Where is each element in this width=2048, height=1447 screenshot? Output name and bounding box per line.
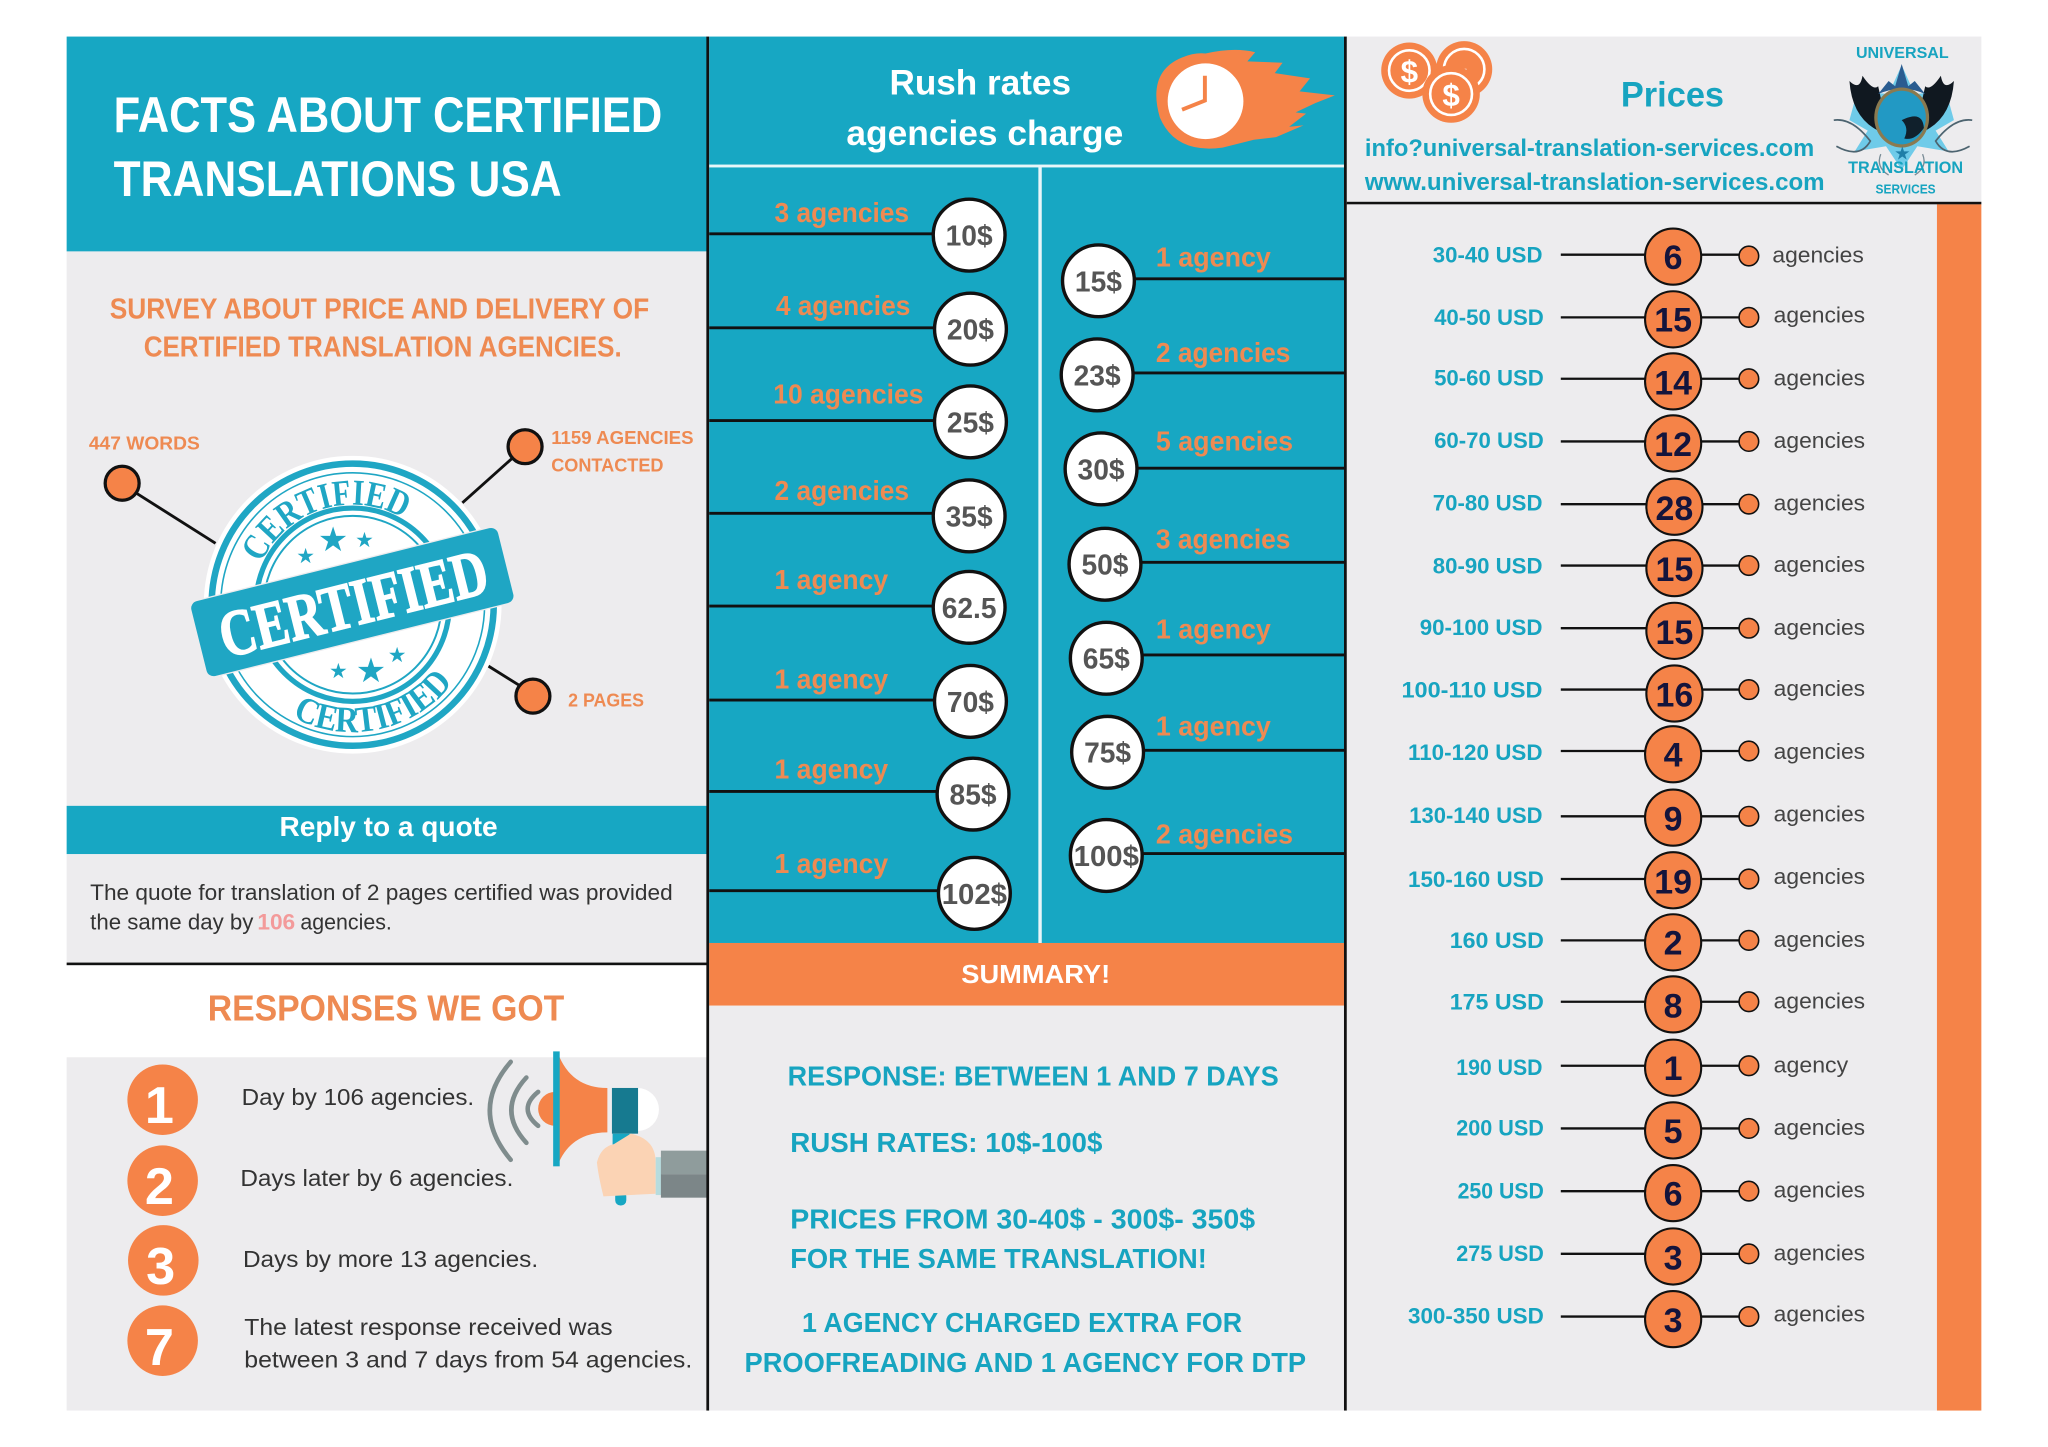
price row: 300-350 USD: 3: [1664, 1302, 1683, 1340]
price row: 60-70 USD: 12: [1654, 426, 1692, 464]
panel: summary bar: [709, 943, 1344, 1006]
icon: megaphone with hand: [490, 1051, 707, 1206]
price row: 70-80 USD: [1433, 479, 1865, 535]
response 3: Days by more 13 agencies.: [243, 1246, 538, 1272]
price row: 30-40 USD: [1433, 229, 1864, 285]
text: contact details: www.universal-translation-services.com: [1364, 169, 1825, 196]
price row: 130-140 USD: agencies: [1774, 802, 1865, 827]
price row: 40-50 USD: 40-50 USD: [1434, 305, 1544, 330]
text: prices summary: PRICES FROM 30-40$ - 300$- 350$: [790, 1203, 1256, 1234]
text: extra charges summary: PROOFREADING AND 1 AGENCY FOR DTP: [745, 1347, 1306, 1378]
price row: 200 USD: 200 USD: [1456, 1116, 1544, 1141]
response 7: The latest response received was: [244, 1314, 613, 1340]
text: prices summary: FOR THE SAME TRANSLATION!: [790, 1243, 1207, 1274]
price row: 90-100 USD: 15: [1656, 614, 1693, 652]
response 3: 3: [146, 1238, 175, 1296]
price row: 200 USD: 5: [1664, 1113, 1683, 1151]
heading: survey subtitle: SURVEY ABOUT PRICE AND DELIVERY OF: [110, 294, 649, 326]
rush right: 100$: [1070, 819, 1344, 891]
rush right: 75$: 1 agency: [1156, 710, 1272, 741]
rush left: 70$: 1 agency: [775, 663, 889, 694]
response 2: Days later by 6 agencies.: [240, 1165, 513, 1191]
rush left: 85$: [709, 753, 1009, 830]
callout: 447 words: [89, 432, 216, 543]
heading: survey subtitle: [110, 294, 649, 364]
rush left: 25$: 10 agencies: [773, 379, 923, 410]
response 2: [127, 1145, 513, 1216]
icon: certified stamp: CERTIFIED: [297, 672, 448, 732]
panel: survey: [66, 251, 706, 806]
price row: 80-90 USD: [1433, 540, 1865, 596]
price row: 40-50 USD: 15: [1654, 302, 1692, 340]
panel: prices header: [1347, 37, 1981, 202]
price row: 30-40 USD: agencies: [1772, 243, 1864, 268]
rush right: 65$: [1070, 614, 1344, 694]
rush left: 10$: [709, 197, 1005, 271]
price row: 190 USD: agency: [1774, 1052, 1849, 1077]
price row: 100-110 USD: 16: [1656, 677, 1693, 715]
price row: 110-120 USD: 110-120 USD: [1408, 740, 1543, 765]
price row: 275 USD: [1456, 1228, 1865, 1285]
response 7: 7: [145, 1319, 174, 1377]
rush right: 23$: [1061, 337, 1344, 411]
rush left: 85$: 1 agency: [775, 753, 889, 784]
heading: rush rates: Rush rates: [889, 64, 1071, 103]
response 1: Day by 106 agencies.: [242, 1084, 474, 1110]
rush right: 23$: 2 agencies: [1156, 337, 1290, 368]
price row: 130-140 USD: 130-140 USD: [1409, 803, 1543, 828]
panel: price list: [1347, 204, 1981, 1411]
price row: 100-110 USD: [1401, 665, 1865, 722]
price row: 300-350 USD: 300-350 USD: [1408, 1304, 1544, 1329]
text: response summary: RESPONSE: BETWEEN 1 AND 7 DAYS: [788, 1060, 1279, 1091]
icon: certified stamp: ★: [355, 528, 374, 552]
rush right: 15$: 1 agency: [1156, 241, 1272, 272]
price row: 60-70 USD: 60-70 USD: [1434, 428, 1544, 453]
price row: 90-100 USD: [1420, 603, 1865, 659]
panel: summary text: [709, 1006, 1344, 1411]
price row: 190 USD: [1456, 1040, 1849, 1096]
price row: 150-160 USD: 19: [1654, 863, 1692, 901]
icon: certified stamp: ★: [329, 659, 348, 683]
price row: 50-60 USD: 14: [1654, 364, 1692, 402]
heading: reply to a quote: Reply to a quote: [280, 811, 498, 842]
icon: coins: $: [1401, 54, 1418, 89]
price row: 50-60 USD: agencies: [1774, 365, 1865, 390]
price row: 70-80 USD: 70-80 USD: [1433, 491, 1543, 516]
price row: 100-110 USD: 100-110 USD: [1401, 677, 1543, 702]
price row: 80-90 USD: agencies: [1774, 552, 1865, 577]
rush right: 65$: 1 agency: [1156, 614, 1272, 645]
icon: certified stamp: CERTIFIED: [212, 536, 495, 672]
rush left: 25$: 25$: [947, 407, 994, 439]
price row: 30-40 USD: 30-40 USD: [1433, 243, 1543, 268]
rush right: 30$: 5 agencies: [1156, 426, 1293, 457]
text: quote sentence: 106: [257, 909, 295, 934]
price row: 130-140 USD: 9: [1664, 801, 1683, 839]
price row: 50-60 USD: [1434, 353, 1865, 409]
price row: 150-160 USD: [1408, 852, 1865, 908]
price row: 60-70 USD: agencies: [1774, 428, 1865, 453]
text: prices summary: [790, 1203, 1256, 1274]
rush right: 30$: [1065, 426, 1344, 505]
price row: 175 USD: 175 USD: [1450, 990, 1544, 1015]
rush right: 65$: 65$: [1083, 644, 1130, 676]
rush left: 35$: [709, 475, 1005, 552]
rush right: 15$: [1063, 241, 1344, 317]
rush right: 50$: [1069, 524, 1344, 600]
rush left: 62.5: 1 agency: [775, 564, 889, 595]
rush right: 15$: 15$: [1075, 266, 1122, 298]
rush right: 75$: 75$: [1084, 738, 1131, 770]
text: rush rates summary: RUSH RATES: 10$-100$: [790, 1127, 1103, 1158]
callout: 1159 agencies contacted: [462, 427, 694, 503]
price row: 90-100 USD: agencies: [1774, 615, 1865, 640]
panel: responses: [67, 1051, 707, 1411]
response 7: [127, 1305, 692, 1377]
icon: flaming clock: [1156, 50, 1335, 149]
text: quote sentence: agencies.: [300, 909, 392, 934]
price row: 175 USD: agencies: [1774, 988, 1865, 1013]
panel: rush rates: [709, 37, 1344, 943]
price row: 40-50 USD: [1434, 291, 1865, 347]
heading: rush rates: agencies charge: [846, 114, 1123, 153]
panel: reply to a quote bar: [67, 806, 707, 854]
rush right: 100$: 100$: [1074, 841, 1139, 873]
callout: 1159 agencies contacted: CONTACTED: [551, 454, 664, 475]
price row: 130-140 USD: [1409, 790, 1865, 846]
icon: certified stamp: CERTIFIED: [244, 480, 409, 558]
rush left: 70$: [709, 663, 1006, 737]
text: extra charges summary: 1 AGENCY CHARGED EXTRA FOR: [802, 1307, 1242, 1338]
price row: 175 USD: [1450, 976, 1865, 1032]
rush left: 35$: 35$: [946, 501, 993, 533]
price row: 90-100 USD: 90-100 USD: [1420, 615, 1543, 640]
price row: 110-120 USD: [1408, 726, 1865, 782]
price row: 150-160 USD: agencies: [1774, 864, 1865, 889]
rush left: 102$: 102$: [942, 879, 1007, 911]
price row: 160 USD: agencies: [1774, 927, 1865, 952]
price row: 110-120 USD: agencies: [1774, 739, 1865, 764]
icon: coins: [1381, 41, 1492, 123]
callout: 2 pages: [489, 666, 644, 713]
rush right: 100$: 2 agencies: [1156, 819, 1293, 850]
logo: universal translation services: UNIVERSAL: [1856, 45, 1949, 62]
icon: coins: $: [1442, 78, 1460, 113]
rush right: 50$: 3 agencies: [1156, 524, 1290, 555]
icon: certified stamp: [191, 456, 514, 754]
heading: survey subtitle: CERTIFIED TRANSLATION AGENCIES.: [144, 332, 622, 364]
rush left: 62.5: 62.5: [942, 593, 997, 625]
rush left: 102$: [709, 848, 1010, 929]
price row: 160 USD: [1450, 914, 1865, 970]
heading: responses we got: RESPONSES WE GOT: [208, 988, 564, 1029]
heading: main title: FACTS ABOUT CERTIFIED: [114, 87, 662, 143]
column divider right: [1344, 37, 1347, 1411]
price row: 150-160 USD: 150-160 USD: [1408, 867, 1544, 892]
rush left: 10$: 3 agencies: [775, 197, 909, 228]
icon: certified stamp: ★: [356, 651, 386, 691]
price row: 50-60 USD: 50-60 USD: [1434, 365, 1544, 390]
text: quote sentence: the same day by: [90, 909, 254, 934]
text: contact details: [1364, 135, 1825, 196]
price row: 110-120 USD: 4: [1664, 737, 1683, 775]
text: quote sentence: [90, 880, 673, 934]
icon: certified stamp: ★: [388, 643, 406, 667]
price row: 200 USD: [1456, 1102, 1865, 1158]
icon: certified stamp: ★: [318, 520, 348, 560]
rush left: 85$: 85$: [950, 780, 997, 812]
icon: certified stamp: ★: [296, 544, 315, 568]
price row: 200 USD: agencies: [1774, 1115, 1865, 1140]
callout: 1159 agencies contacted: 1159 AGENCIES: [551, 427, 694, 448]
rush right: 30$: 30$: [1078, 454, 1125, 486]
price row: 250 USD: agencies: [1774, 1178, 1865, 1203]
text: contact details: info?universal-translation-services.com: [1365, 135, 1814, 162]
rush right: 23$: 23$: [1074, 360, 1121, 392]
heading: prices: Prices: [1621, 75, 1724, 114]
price row: 80-90 USD: 80-90 USD: [1433, 553, 1543, 578]
heading: summary: SUMMARY!: [961, 959, 1110, 989]
callout: 2 pages: 2 PAGES: [568, 690, 644, 711]
price row: 250 USD: 6: [1664, 1176, 1683, 1214]
price row: 250 USD: 250 USD: [1458, 1178, 1544, 1203]
logo: universal translation services: SERVICES: [1876, 181, 1936, 196]
price row: 275 USD: 3: [1664, 1240, 1683, 1278]
price row: 30-40 USD: 6: [1664, 239, 1683, 277]
panel: quote text: [67, 854, 707, 963]
logo: universal translation services: TRANSLATION: [1848, 158, 1963, 177]
response 7: between 3 and 7 days from 54 agencies.: [244, 1346, 692, 1372]
price row: 190 USD: 190 USD: [1456, 1055, 1543, 1080]
heading: main title: [114, 87, 662, 207]
response 2: 2: [145, 1158, 174, 1216]
rush left: 102$: 1 agency: [775, 848, 889, 879]
price row: 60-70 USD: [1434, 415, 1865, 471]
panel: title: [67, 37, 707, 251]
price row: 250 USD: [1458, 1165, 1865, 1221]
heading: main title: TRANSLATIONS USA: [114, 151, 562, 207]
rush left: 20$: 20$: [947, 315, 994, 347]
rush left: 25$: [709, 379, 1006, 458]
rush left: 20$: [709, 290, 1006, 365]
logo: universal translation services: ★: [1894, 143, 1911, 164]
price row: 100-110 USD: agencies: [1774, 676, 1865, 701]
text: quote sentence: The quote for translation of 2 pages certified was provided: [90, 880, 673, 905]
price row: 160 USD: 160 USD: [1450, 928, 1544, 953]
rush right: 50$: 50$: [1081, 550, 1129, 582]
price row: 175 USD: 8: [1664, 987, 1683, 1025]
rush left: 62.5: [709, 564, 1005, 643]
column divider left: [706, 37, 709, 1411]
heading: rush rates: [846, 64, 1123, 153]
logo: universal translation services: [1834, 45, 1972, 196]
price row: 275 USD: 275 USD: [1456, 1241, 1544, 1266]
rush left: 35$: 2 agencies: [775, 475, 909, 506]
icon: coins: -: [1461, 57, 1467, 78]
rush left: 20$: 4 agencies: [776, 290, 910, 321]
rush left: 10$: 10$: [946, 221, 993, 253]
rush left: 70$: 70$: [947, 687, 994, 719]
orange strip: [1937, 204, 1981, 1411]
price row: 275 USD: agencies: [1774, 1240, 1865, 1265]
price row: 70-80 USD: agencies: [1774, 491, 1865, 516]
price row: 300-350 USD: agencies: [1774, 1302, 1865, 1327]
response 1: 1: [145, 1077, 174, 1135]
callout: 447 words: 447 WORDS: [89, 432, 200, 453]
price row: 80-90 USD: 15: [1656, 551, 1693, 589]
price row: 70-80 USD: 28: [1656, 490, 1693, 528]
rush right: 75$: [1072, 710, 1344, 788]
response 3: [128, 1225, 538, 1296]
price row: 190 USD: 1: [1664, 1050, 1683, 1088]
text: extra charges summary: [745, 1307, 1306, 1378]
price row: 40-50 USD: agencies: [1774, 303, 1865, 328]
price row: 160 USD: 2: [1664, 925, 1683, 963]
price row: 300-350 USD: [1408, 1291, 1865, 1347]
response 1: [127, 1064, 474, 1135]
